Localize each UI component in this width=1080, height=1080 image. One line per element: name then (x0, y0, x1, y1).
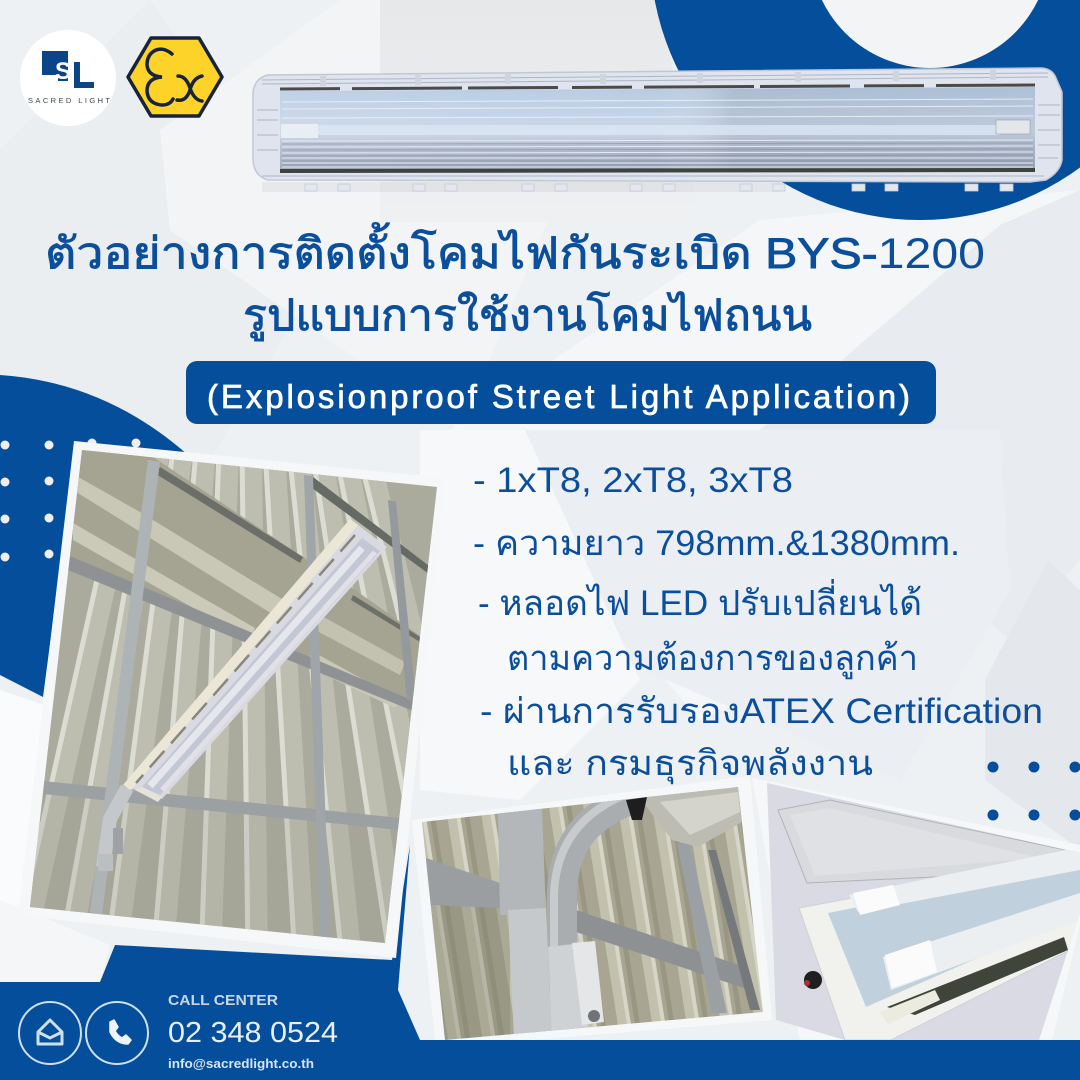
feature list: - หลอดไฟ LED ปรับเปลี่ยนได้ (478, 579, 922, 623)
feature list: - ความยาว 798mm.&1380mm. (473, 524, 960, 563)
photo frame: street light on wall (30, 441, 437, 958)
blue shape: footer panel (0, 845, 1080, 1080)
phone number: 02 348 0524 (168, 1017, 338, 1049)
subtitle pill: (Explosionproof Street Light Application) (207, 378, 910, 415)
dots: blue grid (988, 762, 1080, 820)
title (45, 222, 985, 342)
lamp product image (253, 68, 1062, 192)
tube 2 (883, 893, 1080, 990)
title: ตัวอย่างการติดตั้งโคมไฟกันระเบิด BYS- 1200 (45, 222, 985, 278)
logo: Sacred Light: SACRED LIGHT (28, 96, 110, 105)
lid (778, 800, 1080, 883)
feature list: ตามความต้องการของลูกค้า (507, 639, 918, 679)
feature list: - ผ่านการรับรองATEX Certification (480, 692, 1043, 731)
blue shape: left curved panel (0, 375, 188, 697)
email: info@sacredlight.co.th (168, 1056, 314, 1071)
beam (426, 858, 500, 908)
column (498, 808, 546, 915)
subtitle pill (186, 361, 936, 424)
beams (70, 450, 420, 704)
photo frame: pole bracket close-up (422, 787, 763, 1040)
feature list: - 1xT8, 2xT8, 3xT8 (473, 461, 793, 500)
icon: phone (86, 1002, 148, 1064)
logo: Sacred Light: S (55, 58, 71, 85)
housing (798, 898, 1078, 1040)
pole (103, 788, 127, 867)
dots: white grid (0, 438, 140, 562)
footer contact (19, 992, 338, 1071)
bent conduit (562, 800, 630, 1030)
tube 1 (849, 847, 1080, 912)
logo: Ex hexagon (128, 38, 222, 116)
plate and clamp (508, 908, 552, 1040)
diagonal lamp (123, 519, 387, 802)
blue shape: top right circle (650, 0, 1080, 220)
photo: opened lamp with LED tubes (752, 778, 1080, 1050)
icon: envelope (19, 1002, 81, 1064)
feature list: และ กรมธุรกิจพลังงาน (507, 744, 873, 784)
call center label: CALL CENTER (168, 992, 278, 1009)
wiring (887, 937, 1068, 1015)
logo: Sacred Light (20, 30, 116, 126)
lamp end (639, 787, 742, 847)
title: รูปแบบการใช้งานโคมไฟถนน (243, 291, 812, 342)
footer band (0, 1040, 1080, 1080)
reflector plate (828, 863, 1080, 1007)
feature list (473, 461, 1043, 784)
